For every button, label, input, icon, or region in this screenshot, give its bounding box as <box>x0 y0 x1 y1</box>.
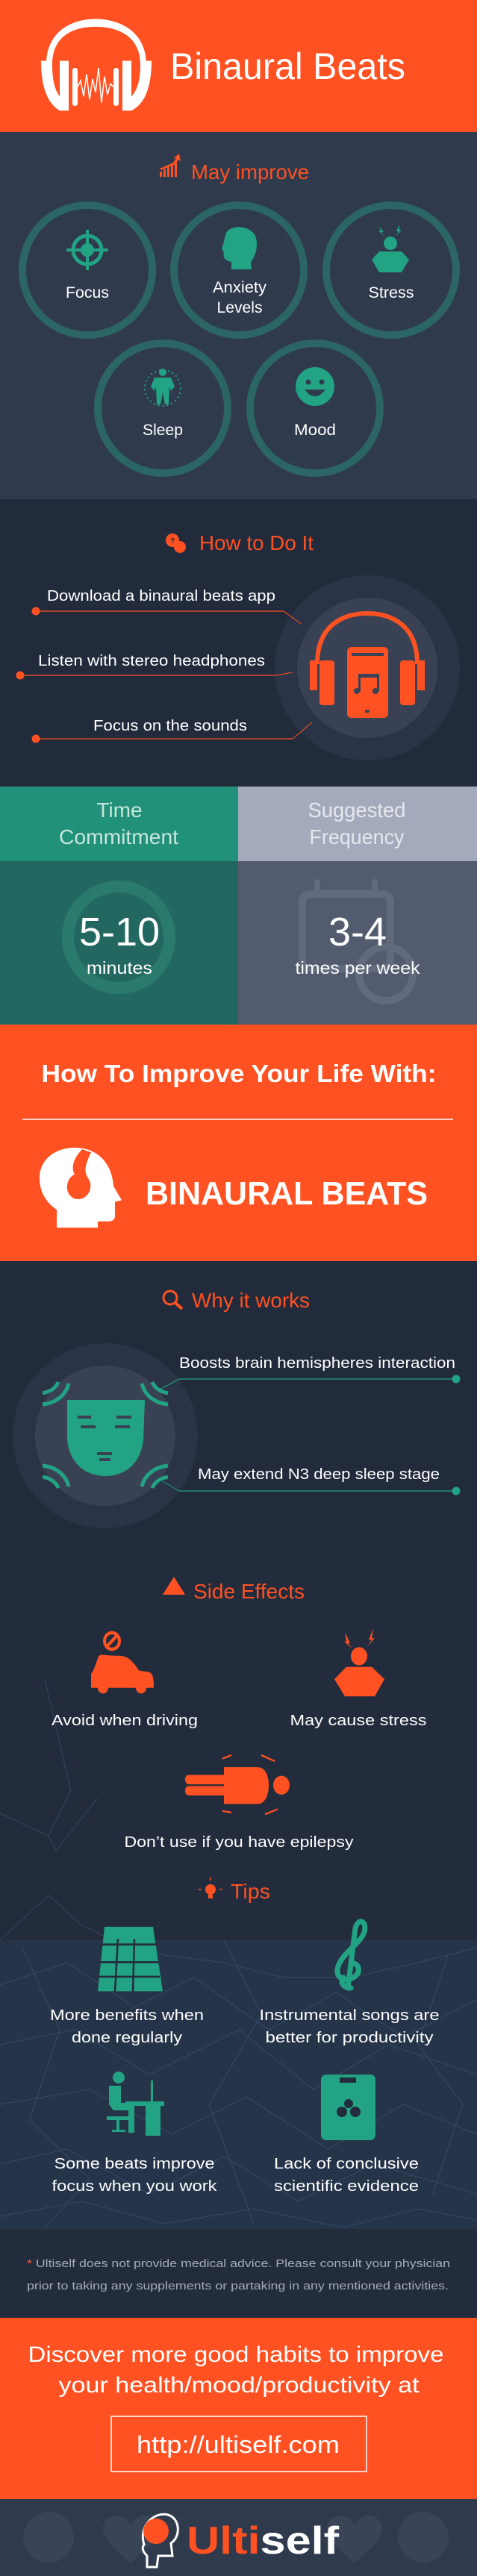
heading: side effects <box>163 1577 305 1603</box>
point 1: Boosts brain hemispheres interaction <box>179 1355 455 1372</box>
panel: side effects and tips <box>0 1554 477 2229</box>
panel: time commitment: minutes <box>87 958 152 978</box>
tip: calendar: More benefits when <box>50 2007 204 2024</box>
panel: time commitment: 5-10 <box>79 910 160 954</box>
disclaimer: * Ultiself does not provide medical advice. Please consult your physician <box>27 2257 450 2270</box>
title: Binaural Beats <box>170 46 405 87</box>
heading: why it works: Why it works <box>192 1289 310 1312</box>
panel: why it works <box>0 1261 477 1554</box>
tip: person at desk: focus when you work <box>52 2178 218 2195</box>
tip: person at desk <box>52 2072 218 2195</box>
panel: time commitment: Time <box>97 798 142 822</box>
panel: how to do it <box>0 499 477 787</box>
point 2 <box>163 1466 460 1495</box>
circle: mood: Mood <box>294 422 336 439</box>
panel: suggested frequency: 3-4 <box>328 910 387 954</box>
circle: sleep: Sleep <box>143 422 183 439</box>
panel: suggested frequency: Frequency <box>309 825 405 848</box>
circle: stress <box>326 205 456 335</box>
disclaimer <box>0 2229 477 2318</box>
circle: stress: Stress <box>369 284 414 301</box>
panel: time commitment <box>0 787 238 1025</box>
step 2: Listen with stereo headphones <box>38 653 265 669</box>
big headphone phone icon <box>275 575 460 760</box>
step 1 <box>31 588 301 624</box>
circle: anxiety levels <box>174 205 304 335</box>
panel: time commitment: Commitment <box>59 825 178 848</box>
step 2 <box>16 653 293 679</box>
banner: how to improve: BINAURAL BEATS <box>146 1175 428 1212</box>
tip: calendar <box>50 1927 204 2046</box>
tip: clipboard: Lack of conclusive <box>274 2156 419 2172</box>
tip: music clef: Instrumental songs are <box>260 2007 439 2024</box>
call to action <box>0 2318 477 2499</box>
heading: how to do it: ? <box>170 537 175 545</box>
icon: calendar background <box>302 894 413 1001</box>
item: may cause stress <box>290 1628 427 1729</box>
heading: how to do it: How to Do It <box>199 531 314 554</box>
heading: tips: Tips <box>231 1880 270 1903</box>
footer logo <box>0 2499 477 2576</box>
banner: how to improve <box>0 1025 477 1261</box>
icon: brain head <box>143 2514 178 2567</box>
icon: face with waves <box>13 1343 198 1528</box>
tip: music clef: better for productivity <box>266 2030 433 2046</box>
point 1 <box>160 1355 460 1389</box>
circle: focus: Focus <box>66 284 109 301</box>
tip: calendar: done regularly <box>72 2030 182 2046</box>
icon: head with headphones <box>40 1148 122 1228</box>
heading: may improve: May improve <box>191 160 309 184</box>
item: avoid when driving: Avoid when driving <box>52 1713 198 1729</box>
circle: anxiety levels: Anxiety <box>213 279 267 296</box>
circle: mood <box>250 343 380 473</box>
step 1: Download a binaural beats app <box>47 588 275 604</box>
item: epilepsy <box>124 1755 354 1851</box>
panel: suggested frequency: times per week <box>296 958 420 978</box>
panel: may improve <box>0 132 477 499</box>
panel: suggested frequency: Suggested <box>308 798 406 822</box>
point 2: May extend N3 deep sleep stage <box>198 1466 440 1483</box>
url box <box>111 2416 367 2472</box>
icon: clock background <box>68 887 169 988</box>
tip: clipboard: scientific evidence <box>274 2178 419 2195</box>
tip: person at desk: Some beats improve <box>54 2156 215 2172</box>
banner: how to improve: How To Improve Your Life With: <box>42 1060 436 1087</box>
circle: focus <box>22 205 152 335</box>
call to action: http://ultiself.com <box>137 2431 340 2458</box>
item: may cause stress: May cause stress <box>290 1713 427 1729</box>
call to action: your health/mood/productivity at <box>58 2373 420 2398</box>
tip: music clef <box>260 1922 439 2046</box>
step 3 <box>31 718 312 743</box>
panel: suggested frequency <box>238 787 477 1025</box>
item: avoid when driving <box>52 1633 198 1729</box>
call to action: Discover more good habits to improve <box>28 2342 443 2367</box>
header band <box>0 0 477 132</box>
circle: sleep <box>98 343 228 473</box>
step 3: Focus on the sounds <box>93 718 247 734</box>
heading: tips <box>199 1878 270 1903</box>
heading: may improve <box>160 154 309 184</box>
icon: headphones with waveform <box>41 19 152 110</box>
tip: clipboard <box>274 2075 419 2195</box>
item: epilepsy: Don’t use if you have epilepsy <box>124 1834 354 1851</box>
heading: side effects: Side Effects <box>193 1580 305 1603</box>
disclaimer: prior to taking any supplements or partaking in any mentioned activities. <box>27 2280 449 2292</box>
footer logo: Ulti self <box>187 2519 340 2563</box>
circle: anxiety levels: Levels <box>216 299 263 316</box>
